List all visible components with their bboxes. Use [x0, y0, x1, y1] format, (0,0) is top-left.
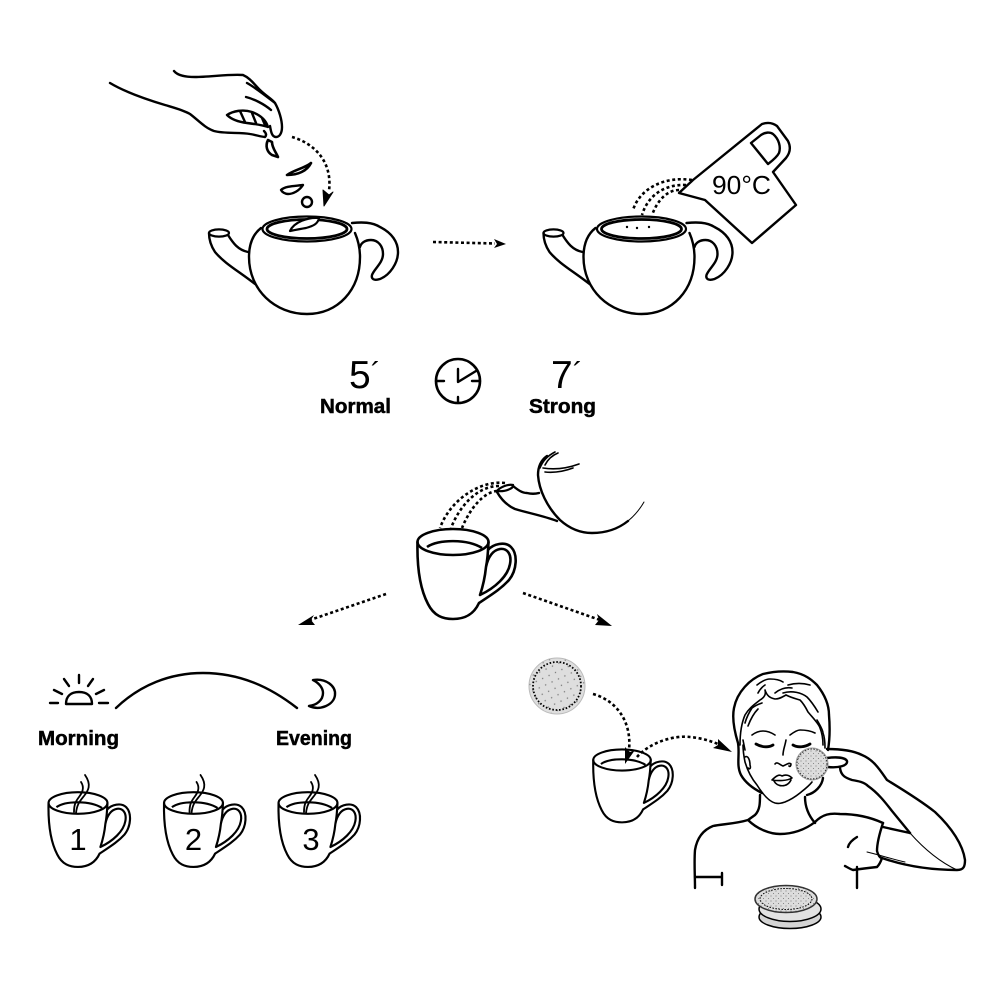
- cup 2: [164, 775, 246, 867]
- icon: clock: [436, 359, 480, 403]
- woman applying pad: [695, 671, 965, 888]
- brewing time: strong: Strong: [529, 395, 596, 418]
- dotted arrow pad to mug: [593, 694, 635, 764]
- dotted arrow between steps: [433, 239, 506, 248]
- small mug: [593, 749, 673, 822]
- cup 3: 3: [302, 822, 320, 857]
- teapot pouring: [497, 452, 644, 533]
- label: morning: Morning: [38, 727, 119, 750]
- neck and torso: [695, 795, 883, 888]
- arrow to daily routine: [298, 594, 386, 625]
- cup 3: [278, 775, 360, 867]
- main mug: [417, 529, 516, 619]
- face: [743, 745, 812, 803]
- cup 2: 2: [185, 822, 202, 857]
- temperature label: 90°C: [712, 170, 771, 200]
- cotton pad on cheek: [796, 748, 828, 780]
- dotted arrow mug to face: [637, 737, 732, 757]
- tea stream into mug: [440, 483, 505, 528]
- falling tea leaves: [267, 140, 312, 207]
- cotton pad: [529, 658, 585, 714]
- label: evening: Evening: [276, 727, 352, 750]
- cup 1: [48, 775, 130, 867]
- teapot with leaf: [209, 216, 398, 314]
- water jug with temperature: [679, 123, 796, 243]
- teapot receiving water: [544, 216, 732, 314]
- icon: sunrise: [50, 675, 108, 704]
- cup 1: 1: [69, 822, 87, 857]
- dotted arrow into teapot: [292, 137, 333, 206]
- brewing time: normal: 5: [349, 354, 371, 397]
- brewing time: strong: [529, 354, 596, 418]
- morning to evening arc: [116, 673, 297, 708]
- arm and sleeve: [845, 823, 883, 870]
- arrow to face care: [523, 593, 612, 626]
- water stream into teapot: [626, 179, 692, 229]
- stack of cotton pads: [755, 886, 821, 928]
- brewing time: normal: [320, 354, 391, 418]
- icon: crescent moon: [309, 680, 335, 708]
- hair: [733, 671, 830, 795]
- brows and eyes: [752, 730, 815, 735]
- nose and lips: [775, 740, 791, 766]
- brewing time: normal: Normal: [320, 395, 391, 418]
- hand dropping tea leaves: [110, 71, 282, 137]
- brewing time: strong: ´: [573, 357, 583, 390]
- brewing time: normal: ´: [371, 357, 381, 390]
- brewing time: strong: 7: [551, 354, 573, 397]
